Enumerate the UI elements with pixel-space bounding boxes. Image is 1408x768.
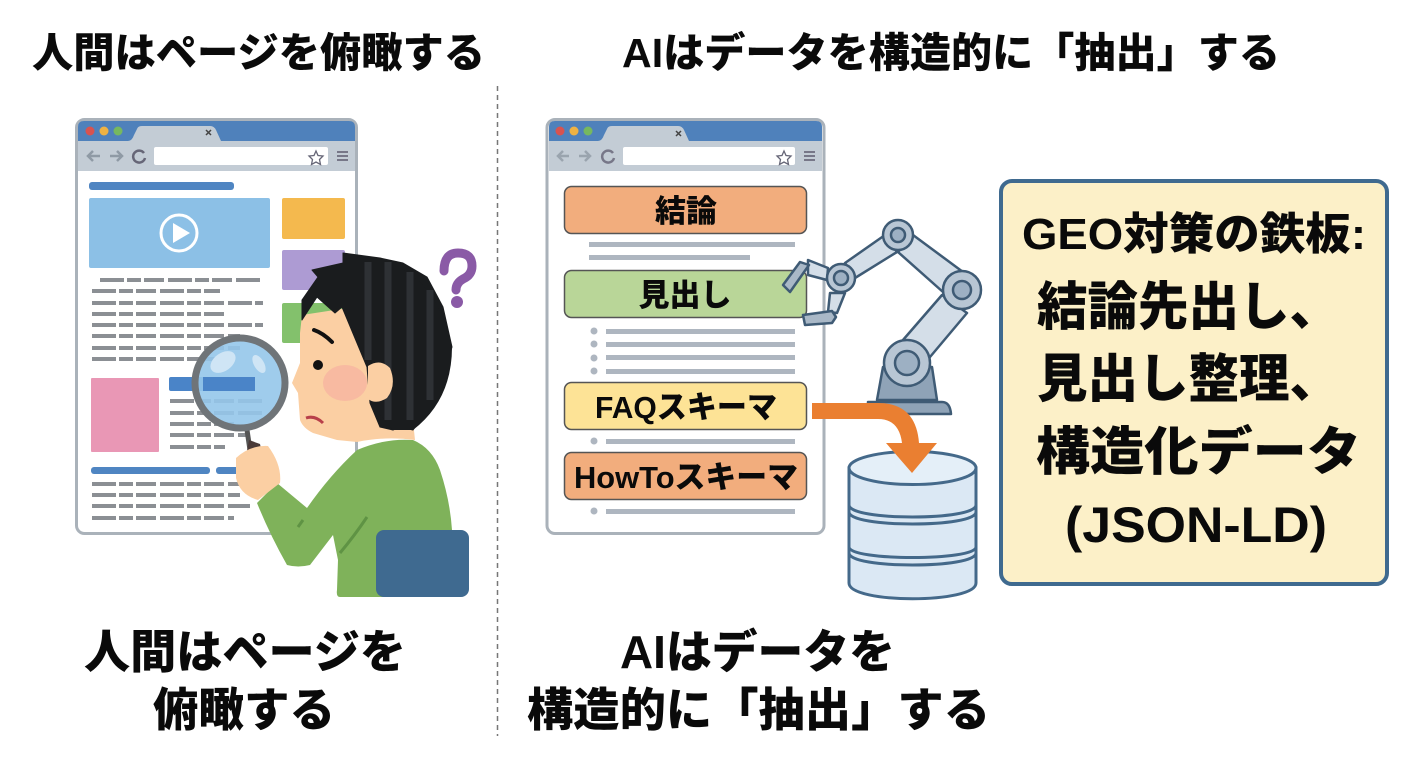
label: HowToスキーマ: HowToスキーマ [574, 460, 798, 495]
face [292, 300, 415, 442]
caption: AI [527, 626, 990, 736]
icon: question mark [444, 253, 472, 308]
illustration: person with magnifier [195, 253, 469, 597]
caption: AI: AIはデータを [620, 626, 895, 678]
illustration: robot arm [783, 220, 981, 414]
illustration: human browser window [76, 120, 356, 534]
callout: GEO summary: GEO対策の鉄板: [1022, 210, 1366, 259]
label: 結論 [564, 186, 806, 234]
hand [236, 446, 280, 500]
heading: AI: AIはデータを構造的に「抽出」する [622, 30, 1280, 76]
text lines [589, 242, 795, 514]
sweater body [257, 440, 452, 597]
magnifier [247, 430, 250, 450]
label: 見出し [564, 270, 806, 318]
label: FAQスキーマ [564, 382, 806, 430]
ear [368, 362, 393, 402]
label: FAQスキーマ: FAQスキーマ [595, 390, 777, 425]
mouth [306, 417, 323, 423]
label: 見出し: 見出し [638, 278, 732, 313]
callout: GEO summary: 結論先出し、 [1037, 279, 1340, 337]
eye and brow [313, 360, 323, 370]
caption: AI: 構造的に「抽出」する [527, 684, 990, 736]
callout: GEO summary: 見出し整理、 [1037, 351, 1340, 409]
label: 結論: 結論 [655, 194, 717, 229]
arrow: schema to database [812, 403, 937, 473]
caption: human: 人間はページを [84, 626, 406, 678]
caption: human: 俯瞰する [153, 684, 335, 736]
callout: GEO summary: 構造化データ [1036, 423, 1361, 482]
hair [302, 253, 452, 430]
bag [376, 530, 469, 597]
caption: human [84, 626, 406, 736]
illustration: AI browser window [547, 120, 824, 534]
callout: GEO summary: (JSON-LD) [1065, 497, 1327, 553]
illustration: database cylinder [849, 452, 976, 599]
callout: GEO summary [1001, 181, 1387, 584]
heading: human: 人間はページを俯瞰する [32, 30, 485, 76]
label: HowToスキーマ [564, 452, 806, 500]
